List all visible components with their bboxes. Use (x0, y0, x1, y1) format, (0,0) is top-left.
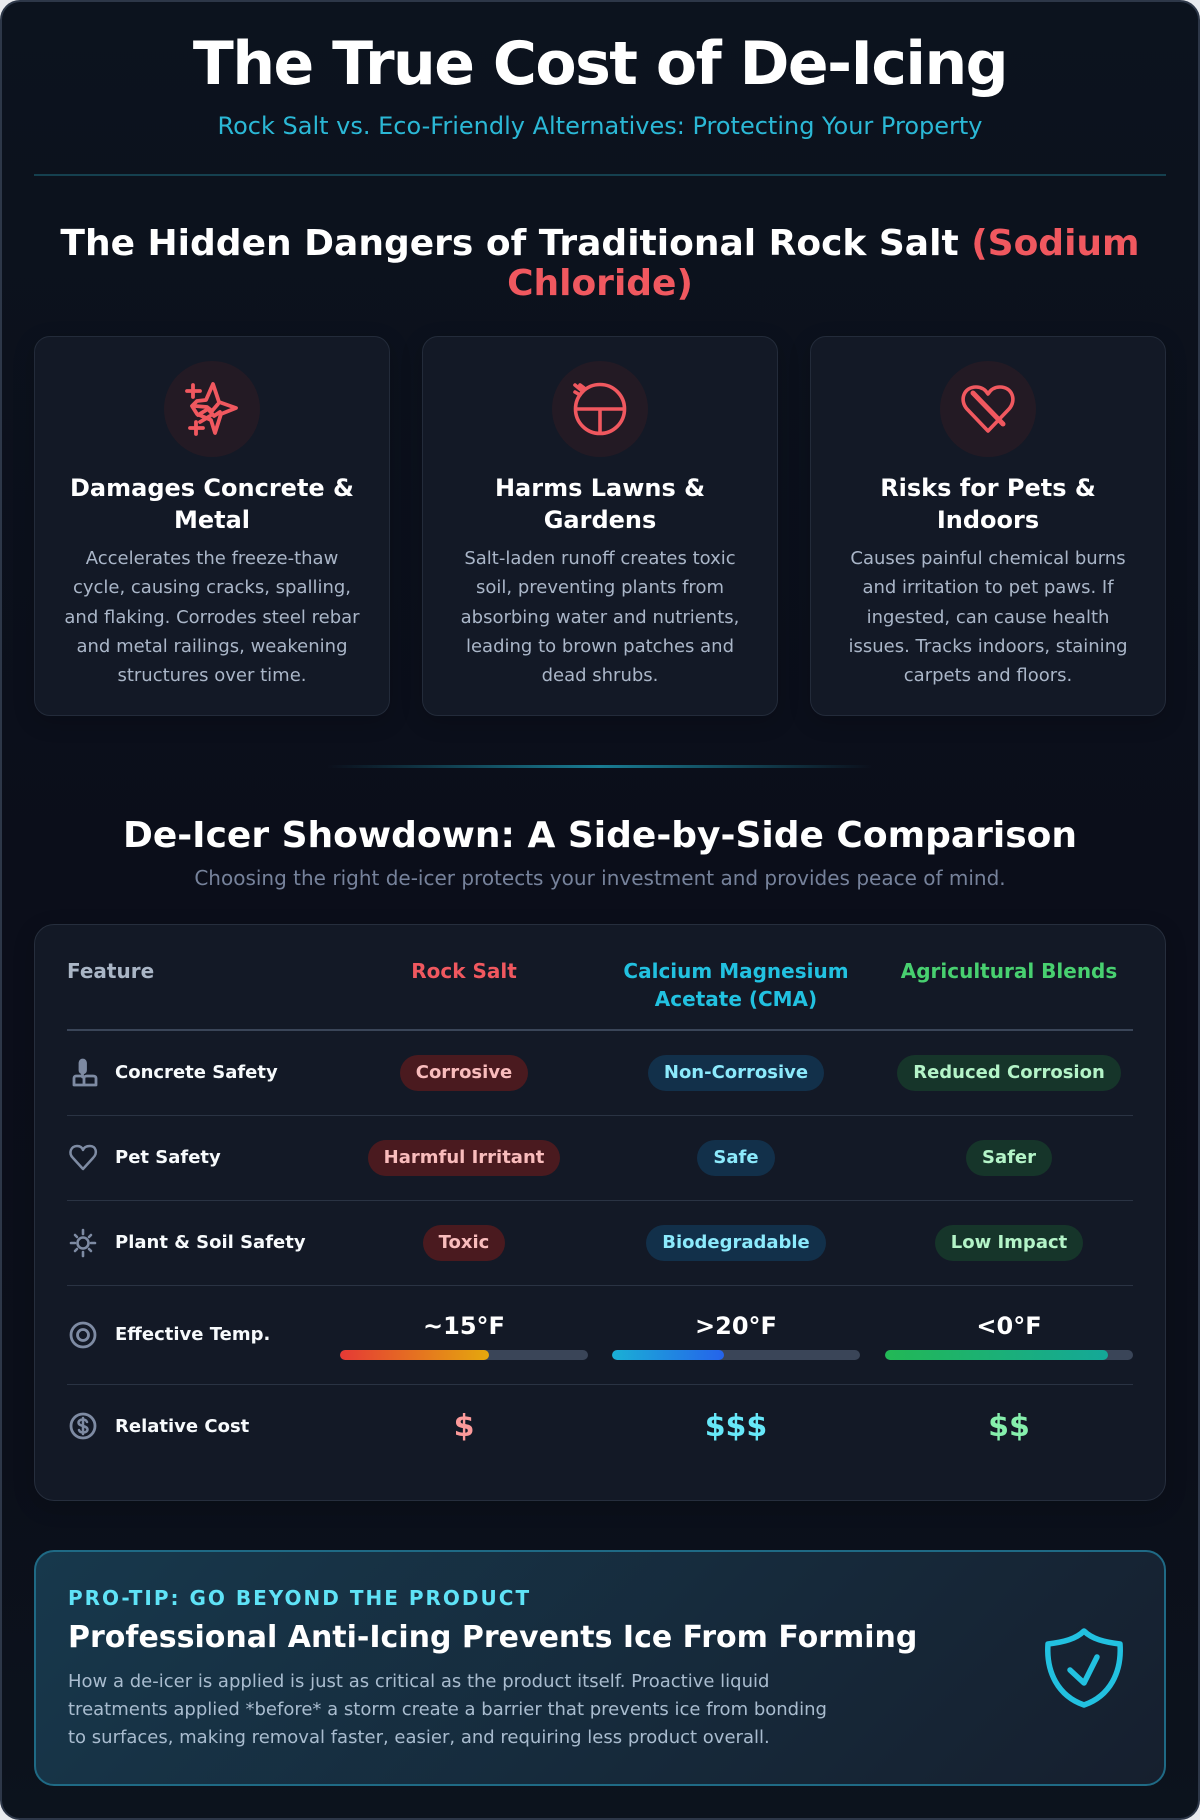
table header: CMA: Acetate (CMA) (655, 987, 817, 1011)
temperature: CMA: >20°F (695, 1312, 777, 1340)
card body: carpets and floors. (904, 665, 1072, 686)
card body (461, 548, 739, 686)
row icon: sun (70, 1228, 96, 1258)
row label: plant and soil safety: Plant & Soil Safety (115, 1232, 306, 1253)
temperature: rock salt: ~15°F (423, 1312, 505, 1340)
pill: low impact: Low Impact (951, 1232, 1067, 1253)
table header: rock salt: Rock Salt (411, 959, 517, 983)
pill: biodegradable: Biodegradable (662, 1232, 810, 1253)
card body: leading to brown patches and (466, 636, 734, 657)
table header: agricultural blends: Agricultural Blends (901, 959, 1117, 983)
row icon: dollar coin (70, 1412, 96, 1440)
pill: corrosive: Corrosive (416, 1062, 512, 1083)
icon circle: heart (940, 361, 1036, 457)
icon circle: plant (552, 361, 648, 457)
temp bar: agricultural blends (885, 1350, 1133, 1360)
card title: Indoors (937, 506, 1039, 534)
card title (880, 474, 1096, 534)
callout body: How a de-icer is applied is just as critical as the product itself. Proactive liquid (68, 1671, 769, 1692)
table header: feature: Feature (67, 959, 154, 983)
card body: Salt-laden runoff creates toxic (464, 548, 736, 569)
card title (70, 474, 354, 534)
card body: absorbing water and nutrients, (461, 607, 739, 628)
header divider (34, 174, 1166, 176)
title: The True Cost of De-Icing (193, 29, 1007, 99)
heading: showdown: De-Icer Showdown: A Side-by-Side Comparison (123, 815, 1077, 856)
card title (495, 474, 705, 534)
row icon: concrete (72, 1058, 98, 1086)
cost: agricultural blends: $$ (988, 1409, 1030, 1444)
callout body (68, 1671, 827, 1748)
row label: pet safety: Pet Safety (115, 1147, 221, 1168)
icon: shield check (1045, 1628, 1123, 1708)
heading: hidden dangers: The Hidden Dangers of Traditional Rock Salt (Sodium Chloride) (60, 223, 1140, 304)
pill: safe: Safe (713, 1147, 759, 1168)
panel: pro-tip callout (34, 1550, 1166, 1786)
card body (848, 548, 1128, 686)
card body: and irritation to pet paws. If (862, 577, 1114, 598)
row label: concrete safety: Concrete Safety (115, 1062, 278, 1083)
icon: circle with split (573, 382, 626, 436)
card title: Metal (174, 506, 250, 534)
subtitle: Rock Salt vs. Eco-Friendly Alternatives: Protecting Your Property (218, 112, 982, 140)
table header: CMA (623, 959, 849, 1011)
pill: non-corrosive: Non-Corrosive (664, 1062, 808, 1083)
card body: soil, preventing plants from (476, 577, 724, 598)
cost: rock salt: $ (454, 1409, 474, 1444)
card body: dead shrubs. (542, 665, 658, 686)
temperature: agricultural blends: <0°F (976, 1312, 1042, 1340)
pill: reduced corrosion: Reduced Corrosion (913, 1062, 1105, 1083)
pill: toxic: Toxic (439, 1232, 489, 1253)
icon: cracked sparkle (185, 382, 238, 436)
icon circle: cracked star (164, 361, 260, 457)
card body: issues. Tracks indoors, staining (848, 636, 1128, 657)
panel: comparison table (34, 924, 1166, 1501)
temp bar: rock salt (340, 1350, 588, 1360)
row icon: target (70, 1322, 96, 1348)
card title: Risks for Pets & (880, 474, 1096, 502)
panel: harms lawns and gardens (422, 336, 778, 716)
row icon: heart (69, 1144, 98, 1170)
temp bar: CMA (612, 1350, 860, 1360)
card body: Accelerates the freeze-thaw (86, 548, 338, 569)
pill: safer: Safer (982, 1147, 1036, 1168)
section divider (327, 765, 873, 768)
row label: effective temp: Effective Temp. (115, 1324, 270, 1345)
card title: Damages Concrete & (70, 474, 354, 502)
callout eyebrow: PRO-TIP: GO BEYOND THE PRODUCT (68, 1586, 531, 1610)
icon: crossed heart (961, 385, 1015, 433)
callout heading: Professional Anti-Icing Prevents Ice From Forming (68, 1620, 917, 1655)
card body: ingested, can cause health (867, 607, 1109, 628)
card body: cycle, causing cracks, spalling, (73, 577, 351, 598)
card body: and metal railings, weakening (76, 636, 348, 657)
card title: Harms Lawns & (495, 474, 705, 502)
table header: CMA: Calcium Magnesium (623, 959, 849, 983)
card title: Gardens (544, 506, 656, 534)
card body (64, 548, 360, 686)
panel: damages concrete and metal (34, 336, 390, 716)
callout body: to surfaces, making removal faster, easier, and requiring less product overall. (68, 1727, 770, 1748)
card body: Causes painful chemical burns (850, 548, 1126, 569)
panel: risks for pets and indoors (810, 336, 1166, 716)
row label: relative cost: Relative Cost (115, 1416, 249, 1437)
card body: and flaking. Corrodes steel rebar (64, 607, 360, 628)
pill: harmful irritant: Harmful Irritant (384, 1147, 544, 1168)
card body: structures over time. (117, 665, 307, 686)
callout body: treatments applied *before* a storm create a barrier that prevents ice from bonding (68, 1699, 827, 1720)
cost: CMA: $$$ (705, 1409, 767, 1444)
section subtitle: Choosing the right de-icer protects your investment and provides peace of mind. (194, 866, 1006, 890)
